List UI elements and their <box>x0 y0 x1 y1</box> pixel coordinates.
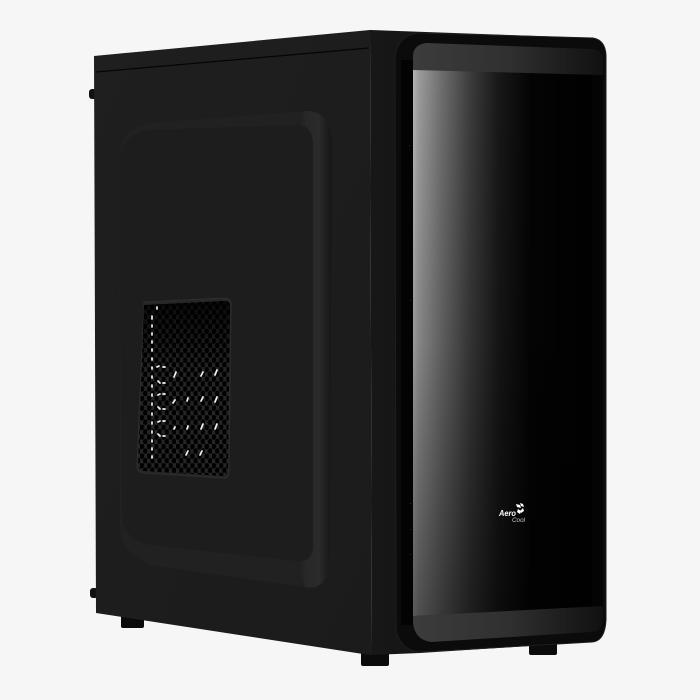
ventilation grille <box>137 298 231 479</box>
foot: rear left <box>121 612 144 628</box>
bezel inner edge <box>401 60 413 625</box>
bezel vent slots <box>409 145 411 555</box>
side panel embossed area <box>119 111 332 588</box>
logo: AeroCool: Aero <box>498 508 516 518</box>
logo: AeroCool: Cool <box>512 517 526 524</box>
glass panel <box>413 69 603 616</box>
front bezel <box>395 33 606 652</box>
front fascia <box>370 30 606 655</box>
foot: front right <box>529 636 557 655</box>
bottom brushed band <box>413 606 603 642</box>
logo: AeroCool <box>498 503 526 524</box>
vent glints <box>152 307 217 458</box>
top brushed band <box>413 43 603 75</box>
rear knob: top <box>89 89 97 99</box>
side panel <box>94 30 372 655</box>
foot: front centre <box>361 646 389 666</box>
illustration: PC tower case <box>89 30 606 666</box>
rear knob: bottom <box>90 588 98 598</box>
